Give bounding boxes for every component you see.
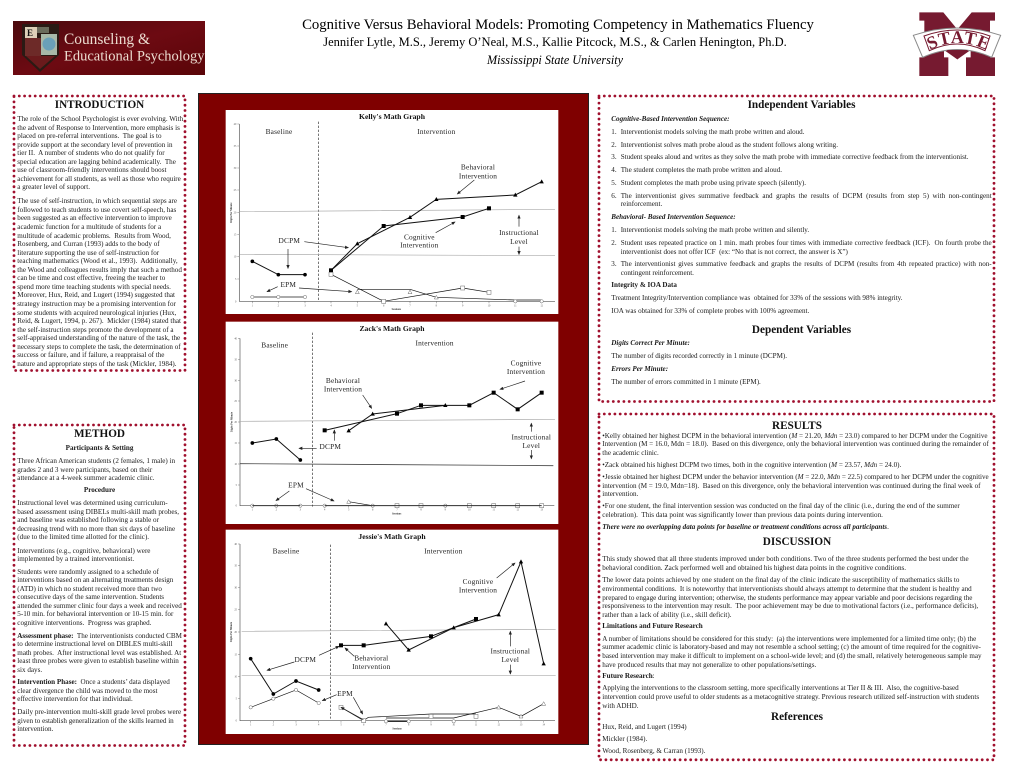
text: introduction paragraph 2	[17, 197, 182, 368]
text: introduction paragraph 1	[17, 115, 184, 191]
text: final session: •For one student, the final intervention session was conducted on the final day of the clinic (i.e., during the end of the summer	[602, 502, 960, 510]
logo: Counseling & Educational Psychology banner: E	[27, 28, 33, 38]
chart: Kelly's math graph: Cognitive	[404, 232, 435, 241]
chart: Jessie's math graph: 11	[475, 723, 478, 726]
chart: Jessie's math graph: 10	[452, 723, 456, 726]
text: schedule: 5-10 min. for behavioral intervention or 10-15 min. for	[17, 610, 173, 618]
text: limitations: based intervention may make it difficult to implement on a school-wide level; and (d) the small, relatively heterogeneous sample may	[602, 652, 982, 660]
chart: Kelly's math graph: Behavioral	[461, 163, 495, 172]
chart: Kelly's math graph: 2	[278, 305, 280, 308]
chart: Zack's math graph: 25	[234, 400, 238, 403]
chart: Jessie's math graph: 7	[385, 723, 387, 726]
text: schedule: cognitive interventions. Progress was graphed.	[17, 619, 151, 627]
text: discussion 2: responsiveness to the intervention may result. The poor achievement may be due to motivational factors (i.e., performance deficits),	[602, 602, 978, 610]
chart: Jessie's math graph: 2	[273, 723, 275, 726]
list: cognitive steps: Student completes the math probe using private speech (silently).	[621, 179, 806, 187]
text: introduction paragraph 2: academic function for a multitude of students for a	[17, 223, 161, 231]
chart: Zack's math graph: 2	[276, 509, 278, 512]
chart: Kelly's math graph: 10	[234, 256, 237, 259]
chart: Kelly's math graph: 5	[235, 278, 237, 281]
panel: independent and dependent variables: 2.	[611, 239, 617, 247]
chart: Jessie's math graph: 5	[236, 697, 238, 700]
text: daily probes	[17, 708, 181, 733]
text: assessment phase: least three probes were given to establish baseline within	[17, 657, 179, 665]
subheading: future research: Future Research:	[602, 672, 655, 680]
text: schedule: consecutive days of the same intervention. Students	[17, 593, 164, 601]
heading: independent variables: Independent Variables	[748, 99, 855, 111]
chart: Kelly's math graph: 20	[234, 211, 237, 214]
chart: Kelly's math graph: 35	[234, 145, 237, 148]
text: limitations: A number of limitations should be considered for this study: (a) the interventions were implemented for a limited time only; (b) the	[602, 635, 976, 643]
chart: Kelly's math graph: 9	[462, 305, 464, 308]
chart: Zack's math graph: Zack's Math Graph	[359, 324, 425, 333]
chart: Kelly's math graph: 5	[357, 305, 359, 308]
text: Kelly result: •Kelly obtained her highest DCPM in the behavioral intervention (M = 21.20, Mdn = 23.0) compared to her DCPM under the Cognitive	[602, 432, 988, 440]
chart: Zack's math graph: 8	[420, 509, 422, 512]
chart: Kelly's math graph: EPM	[280, 280, 296, 289]
chart: Kelly's math graph	[226, 110, 558, 314]
text: introduction paragraph 1: The role of the School Psychologist is ever evolving. With	[17, 115, 183, 123]
text: future research	[602, 684, 979, 710]
chart: Zack's math graph: 10	[234, 463, 238, 466]
text: integrity: Treatment Integrity/Intervention compliance was obtained for 33% of the sessions with 98% integrity.	[611, 294, 903, 302]
subheading: cognitive sequence: Cognitive-Based Intervention Sequence:	[611, 115, 730, 123]
text: introduction paragraph 2: the self-instruction steps promote the development of a	[17, 326, 174, 334]
chart: Zack's math graph: Behavioral	[326, 376, 360, 385]
panel: independent and dependent variables: 2.	[611, 141, 617, 149]
chart: Kelly's math graph: 3	[304, 305, 306, 308]
text: daily probes: intervention.	[17, 725, 53, 733]
text: daily probes: Daily pre-intervention multi-skill grade level probes were	[17, 708, 181, 716]
text: procedure: Instructional level was determined using curriculum-	[17, 499, 168, 507]
chart: Jessie's math graph: 25	[234, 609, 238, 612]
text: introduction paragraph 2: literature supporting the use of self-instruction for	[17, 249, 159, 257]
chart: Kelly's math graph: Level	[510, 237, 528, 246]
text: introduction paragraph 2: the Wood and colleagues results imply that such a method	[17, 266, 182, 274]
text: participants: Three African American students (2 females, 1 male) in	[17, 457, 175, 465]
chart: Jessie's math graph: Digits Per Minute	[230, 621, 233, 642]
text: introduction paragraph 2: necessary steps to complete the task, the determination of	[17, 343, 181, 351]
panel: independent and dependent variables: 6.	[611, 192, 617, 200]
chart: Kelly's math graph: 8	[436, 305, 438, 308]
title: Cognitive Versus Behavioral Models: Promoting Competency in Mathematics Fluency	[302, 17, 814, 33]
chart: Jessie's math graph: 12	[497, 723, 501, 726]
chart: Kelly's math graph: 6	[383, 305, 385, 308]
text: Kelly result: Intervention (M = 16.0, Mdn = 18.0). Based on this divergence, only the behavioral intervention was continued during the remainder of	[602, 440, 989, 448]
list: cognitive steps: Interventionist solves math probe aloud as the student follows along writing.	[621, 141, 838, 149]
text: introduction paragraph 1: the advent of Response to Intervention, more emphasis is	[17, 124, 180, 132]
chart: Jessie's math graph: 30	[234, 587, 238, 590]
text: limitations: have produced results that may not generalize to other populations/settings.	[602, 661, 816, 669]
subheading: limitations: Limitations and Future Research	[602, 622, 703, 630]
panel: independent and dependent variables: 4.	[611, 166, 617, 174]
text: interventions: Interventions (e.g., cognitive, behavioral) were	[17, 547, 150, 555]
chart: Zack's math graph: 1	[252, 509, 254, 512]
text: procedure: based assessment using DIBELs multi-skill math probes,	[17, 508, 179, 516]
text: discussion 1	[602, 555, 969, 572]
text: procedure	[17, 499, 179, 541]
chart: Jessie's math graph: Behavioral	[354, 653, 388, 662]
chart: Jessie's math graph: Level	[501, 655, 519, 664]
text: limitations: summer academic clinic is laboratory-based and may not resemble a school setting; (c) the amount of time required for the cognitive-	[602, 643, 981, 651]
chart: Zack's math graph: 4	[324, 509, 326, 512]
text: Jessie result: intervention (M = 19.0, Mdn=18). Based on this divergence, only the behavioral intervention was continued during the final week of	[602, 482, 981, 490]
chart: Jessie's math graph: EPM	[337, 689, 353, 698]
text: introduction paragraph 2: nature and appropriate steps of the task (Mickler, 1984).	[17, 360, 177, 368]
text: introduction paragraph 2: teaching mathematics (Wood et al., 1993). Additionally,	[17, 257, 178, 265]
text: introduction paragraph 2: followed to teach students to use covert self-speech, has	[17, 206, 176, 214]
chart: Jessie's math graph: Intervention	[352, 662, 391, 671]
chart: Zack's math graph: Intervention	[324, 385, 362, 394]
chart: Kelly's math graph: 40	[234, 123, 237, 126]
chart: Zack's math graph: Cognitive	[511, 359, 541, 368]
text: introduction paragraph 2: been suggested as an effective intervention to improve	[17, 214, 172, 222]
heading: dependent variables: Dependent Variables	[752, 324, 851, 336]
text: future research: Applying the interventions to the classroom setting, more specifically interventions at Tier II & III. Also, the cognitive-based	[602, 684, 959, 692]
panel: independent and dependent variables: 3.	[611, 260, 617, 268]
list: cognitive steps: Interventionist models solving the math probe written and aloud.	[621, 128, 804, 136]
text: introduction paragraph 1: achievement for all students, as well as those who require	[17, 175, 181, 183]
chart: Zack's math graph: 9	[445, 509, 447, 512]
chart: Zack's math graph: 5	[236, 484, 238, 487]
text: schedule: attended the summer clinic four days a week and received	[17, 602, 182, 610]
text: interventions: implemented by a trained interventionist.	[17, 555, 134, 563]
chart: Zack's math graph: 11	[492, 509, 496, 512]
list: behavioral steps: Student uses repeated practice on 1 min. math probes four times with immediate corrective feedback (ICF). On fourth probe the	[621, 239, 992, 247]
text: discussion 2: prepared to engage during intervention; otherwise, the students performance may appear variable and poor decisions regarding the	[602, 594, 972, 602]
text: introduction paragraph 2: self-appraised understanding of the nature of the task, the	[17, 334, 180, 342]
text: introduction paragraph 2: The use of self-instruction, in which sequential steps are	[17, 197, 177, 205]
chart: Jessie's math graph: 4	[318, 723, 320, 726]
subheading: behavioral sequence: Behavioral- Based Intervention Sequence:	[611, 213, 736, 221]
text: introduction paragraph 1: placed on pre-referral interventions. The goal is to	[17, 132, 162, 140]
heading: discussion: DISCUSSION	[763, 536, 831, 548]
panel: independent and dependent variables: 3.	[611, 153, 617, 161]
text: participants: attendance at a 4-week summer academic clinic.	[17, 474, 155, 482]
text: introduction paragraph 2: some students with acquired neurological injuries (Hux,	[17, 308, 176, 316]
chart: Jessie's math graph: Baseline	[273, 547, 299, 556]
chart: Kelly's math graph: 1	[252, 305, 254, 308]
chart: Zack's math graph: Baseline	[261, 341, 288, 350]
chart: Jessie's math graph: Sessions	[392, 727, 402, 730]
chart: Jessie's math graph: 35	[234, 565, 238, 568]
text: introduction paragraph 1: a greater level of support.	[17, 183, 90, 191]
list: cognitive steps: The student completes the math probe written and aloud.	[621, 166, 782, 174]
panel: independent and dependent variables: 1.	[611, 128, 617, 136]
text: introduction paragraph 1: use of classroom-friendly interventions should boost	[17, 166, 166, 174]
text: introduction paragraph 2: Reid, & Lugert, 1994, p. 267). Mickler (1984) stated that	[17, 317, 181, 325]
chart: Jessie's math graph: Cognitive	[463, 577, 493, 586]
chart: Jessie's math graph: 15	[234, 653, 238, 656]
text: IOA: IOA was obtained for 33% of complete probes with 100% agreement.	[611, 307, 809, 315]
logo: Mississippi State M	[912, 12, 1002, 76]
chart: Kelly's math graph: 4	[330, 305, 332, 308]
chart: Jessie's math graph	[226, 530, 558, 734]
chart: Kelly's math graph: 15	[234, 234, 237, 237]
text: schedule	[17, 568, 182, 627]
text: limitations	[602, 635, 982, 669]
text: future research: intervention could prove useful to older students as a metacognitive strategy. Previous research utilized self-instruction with students	[602, 693, 979, 701]
chart: Jessie's math graph: 0	[236, 720, 238, 723]
chart: Zack's math graph: Sessions	[392, 513, 401, 516]
chart: Zack's math graph: Digits Per Minute	[231, 411, 234, 432]
list: behavioral steps: Interventionist models solving the math probe written and silently.	[621, 226, 809, 234]
chart: Zack's math graph: 30	[234, 379, 238, 382]
text: Jessie result: •Jessie obtained her highest DCPM under the behavior intervention (M = 22.0, Mdn = 22.5) compared to her DCPM under the cognitive	[602, 473, 989, 481]
text: assessment phase: six days.	[17, 666, 42, 674]
chart: Kelly's math graph: 11	[514, 305, 517, 308]
heading: method: METHOD	[74, 428, 125, 440]
text: final session	[602, 502, 960, 519]
text: Jessie result	[602, 473, 989, 498]
text: final session: celebration). This data point was significantly lower than previous data points during intervention.	[602, 511, 883, 519]
text: introduction paragraph 2: multitude of academic problems. Results from Wood,	[17, 232, 171, 240]
chart: Kelly's math graph: Intervention	[417, 127, 456, 136]
chart: Jessie's math graph: 1	[250, 723, 252, 726]
text: introduction paragraph 2: Moreover, Hux, Reid, and Lugert (1994) suggested that	[17, 291, 175, 299]
text: digits correct: The number of digits recorded correctly in 1 minute (DCPM).	[611, 352, 787, 360]
panel: method	[12, 424, 186, 747]
subheading: procedure: Procedure	[84, 486, 115, 494]
text: schedule: Students were randomly assigned to a schedule of	[17, 568, 159, 576]
heading: references: References	[771, 711, 823, 723]
chart: Kelly's math graph: 30	[234, 167, 237, 170]
text: assessment phase	[17, 632, 182, 674]
list: cognitive steps: reinforcement.	[621, 200, 662, 208]
logo: Counseling & Educational Psychology banner: Counseling &	[64, 31, 150, 48]
text: participants: grades 2 and 3 were participants, based on their	[17, 466, 152, 474]
text: assessment phase: to determine instructional level on DIBLES multi-skill	[17, 640, 173, 648]
text: participants	[17, 457, 175, 482]
text: intervention phase: Intervention Phase: Once a students’ data displayed	[17, 678, 170, 686]
list: behavioral steps: interventionist does not offer ICF (ex: “No that is not correct, the answer is X”)	[621, 248, 848, 256]
chart: Zack's math graph: 20	[234, 421, 238, 424]
text: procedure: decreasing trend with no more than six days of baseline	[17, 525, 175, 533]
text: daily probes: given to establish generalization of the skills learned in	[17, 717, 174, 725]
text: introduction paragraph 2: success or failure, and if failure, a reappraisal of the	[17, 351, 164, 359]
subheading: digits correct: Digits Correct Per Minute:	[611, 339, 690, 347]
list: behavioral steps: contingent reinforcement.	[621, 269, 694, 277]
chart: Zack's math graph: 3	[300, 509, 302, 512]
text: reference 2: Mickler (1984).	[602, 735, 647, 743]
chart: Zack's math graph: Instructional	[512, 433, 551, 442]
panel: graphs	[198, 93, 589, 745]
text: procedure: (due to the limited time allotted for the clinic).	[17, 533, 149, 541]
chart: Kelly's math graph: 12	[540, 305, 544, 308]
subheading: errors: Errors Per Minute:	[611, 365, 668, 373]
chart: Zack's math graph: 40	[234, 337, 238, 340]
chart: Jessie's math graph: 5	[340, 723, 342, 726]
chart: Zack's math graph: 15	[234, 442, 238, 445]
chart: Kelly's math graph: Sessions	[392, 308, 401, 311]
chart: Kelly's math graph: 25	[234, 189, 237, 192]
chart: Zack's math graph: Intervention	[416, 339, 454, 348]
panel: introduction	[12, 94, 186, 372]
chart: Zack's math graph: 12	[516, 509, 520, 512]
text: procedure: and baseline was established following a stable or	[17, 516, 159, 524]
chart: Kelly's math graph: DCPM	[279, 236, 300, 245]
chart: Kelly's math graph: Instructional	[499, 228, 539, 237]
chart: Jessie's math graph: 9	[430, 723, 432, 726]
subheading: integrity: Integrity & IOA Data	[611, 281, 677, 289]
text: interventions	[17, 547, 150, 563]
text: discussion 2	[602, 576, 978, 619]
chart: Kelly's math graph: 10	[488, 305, 491, 308]
text: introduction paragraph 1: tier II. A number of students who do not qualify for	[17, 149, 165, 157]
chart: Jessie's math graph: Instructional	[491, 646, 530, 655]
heading: results: RESULTS	[772, 420, 822, 432]
text: discussion 2: rather than a lack of ability (i.e., skill deficit).	[602, 611, 732, 619]
chart: Jessie's math graph: 3	[295, 723, 297, 726]
chart: Zack's math graph: 0	[236, 505, 238, 508]
chart: Kelly's math graph: Baseline	[266, 127, 292, 136]
chart: Jessie's math graph: Intervention	[459, 586, 497, 595]
chart: Jessie's math graph: Jessie's Math Graph	[358, 532, 426, 541]
text: intervention phase: effective intervention for that individual.	[17, 695, 133, 703]
chart: Kelly's math graph: Digits Per Minute	[230, 202, 233, 223]
chart: Zack's math graph: Level	[522, 441, 540, 450]
text: introduction paragraph 2: spend more time teaching students with special needs.	[17, 283, 171, 291]
chart: Jessie's math graph: 14	[542, 723, 546, 726]
chart: Jessie's math graph: 6	[363, 723, 365, 726]
text: intervention phase	[17, 678, 170, 703]
text: errors: The number of errors committed in 1 minute (EPM).	[611, 378, 761, 386]
text: introduction paragraph 1: provide support at the secondary level of prevention in	[17, 141, 173, 149]
text: reference 1: Hux, Reid, and Lugert (1994)	[602, 723, 687, 731]
panel: independent and dependent variables: 5.	[611, 179, 617, 187]
chart: Jessie's math graph: DCPM	[295, 655, 316, 664]
authors: Jennifer Lytle, M.S., Jeremy O’Neal, M.S., Kallie Pitcock, M.S., & Carlen Henington, Ph.D.	[323, 35, 787, 49]
chart: Jessie's math graph: 20	[234, 631, 238, 634]
chart: Kelly's math graph: Intervention	[459, 171, 497, 180]
panel: independent and dependent variables	[598, 94, 996, 403]
chart: Jessie's math graph: 8	[408, 723, 410, 726]
list: behavioral steps	[611, 226, 992, 277]
chart: Jessie's math graph: 10	[234, 675, 238, 678]
chart: Zack's math graph: EPM	[288, 481, 304, 490]
chart: Zack's math graph: 6	[372, 509, 374, 512]
text: introduction paragraph 2: strategy instruction may be a promising intervention for	[17, 300, 176, 308]
text: schedule: interventions based on an alternating treatments design	[17, 576, 173, 584]
text: overlap note: There were no overlapping data points for baseline or treatment conditions across all participants.	[602, 523, 889, 531]
chart: Jessie's math graph: 13	[520, 723, 523, 726]
list: cognitive steps	[611, 128, 992, 208]
chart: Kelly's math graph: 7	[409, 305, 411, 308]
subheading: participants: Participants & Setting	[66, 444, 133, 452]
chart: Kelly's math graph: 0	[235, 300, 237, 303]
text: intervention phase: clear divergence the child was moved to the most	[17, 687, 157, 695]
text: assessment phase: Assessment phase: The interventionists conducted CBM	[17, 632, 182, 640]
chart: Zack's math graph: 5	[348, 509, 350, 512]
chart: Jessie's math graph: Intervention	[424, 547, 463, 556]
text: introduction paragraph 1: special education are lagging behind academically. The	[17, 158, 176, 166]
panel: results and discussion	[598, 412, 996, 762]
text: introduction paragraph 2: can be time and cost effective, freeing the teacher to	[17, 274, 165, 282]
text: discussion 2: environmental conditions. It is noteworthy that interventionists should always attempt to determine that the student is healthy and	[602, 585, 972, 593]
chart: Zack's math graph: 10	[468, 509, 471, 512]
chart: Zack's math graph	[226, 322, 558, 524]
list: cognitive steps: The interventionist gives summative feedback and graphs the results of DCPM (results from step 5) with non-contingent	[621, 192, 992, 200]
chart: Zack's math graph: DCPM	[320, 442, 341, 451]
chart: Kelly's math graph: Kelly's Math Graph	[359, 112, 426, 121]
list: cognitive steps: Student speaks aloud and writes as they solve the math probe with immediate corrective feedback from the interventionist.	[621, 153, 969, 161]
text: discussion 1: This study showed that all three students improved under both conditions. Two of the three students performed the best under the	[602, 555, 969, 563]
chart: Kelly's math graph: Intervention	[400, 241, 439, 250]
chart: Jessie's math graph: 40	[234, 543, 238, 546]
logo: Mississippi State M: STATE	[927, 31, 990, 50]
chart: Zack's math graph: 35	[234, 358, 238, 361]
logo: Counseling & Educational Psychology banner	[13, 21, 205, 75]
chart: Zack's math graph: 7	[396, 509, 398, 512]
heading: introduction: INTRODUCTION	[55, 99, 144, 111]
text: introduction paragraph 2: Rosenberg, and Curran (1993) adds to the body of	[17, 240, 160, 248]
text: Jessie result: intervention.	[602, 490, 638, 498]
logo: Counseling & Educational Psychology banner: Educational Psychology	[64, 48, 205, 64]
affiliation: Mississippi State University	[487, 53, 623, 67]
text: schedule: (ATD) in which no student received more than two	[17, 585, 162, 593]
list: behavioral steps: The interventionist gives summative feedback and graphs the results of DCPM (results from 4th repeated practice) with non-	[621, 260, 992, 268]
text: reference 3: Wood, Rosenberg, & Carran (1993).	[602, 747, 705, 755]
text: assessment phase: math probes. After instructional level was established. At	[17, 649, 181, 657]
text: Kelly result	[602, 432, 989, 457]
chart: Zack's math graph: 13	[540, 509, 544, 512]
text: future research: with ADHD.	[602, 702, 639, 710]
text: Kelly result: the academic clinic.	[602, 449, 659, 457]
panel: independent and dependent variables: 1.	[611, 226, 617, 234]
chart: Zack's math graph: Intervention	[507, 367, 545, 376]
text: discussion 2: The lower data points achieved by one student on the final day of the clinic indicate the susceptibility of mathematics skills to	[602, 576, 959, 584]
text: Zack result: •Zack obtained his highest DCPM two times, both in the cognitive intervention (M = 23.57, Mdn = 24.0).	[602, 461, 901, 469]
text: discussion 1: behavioral condition. Zack performed well and obtained his highest data points in the cognitive conditions.	[602, 564, 906, 572]
